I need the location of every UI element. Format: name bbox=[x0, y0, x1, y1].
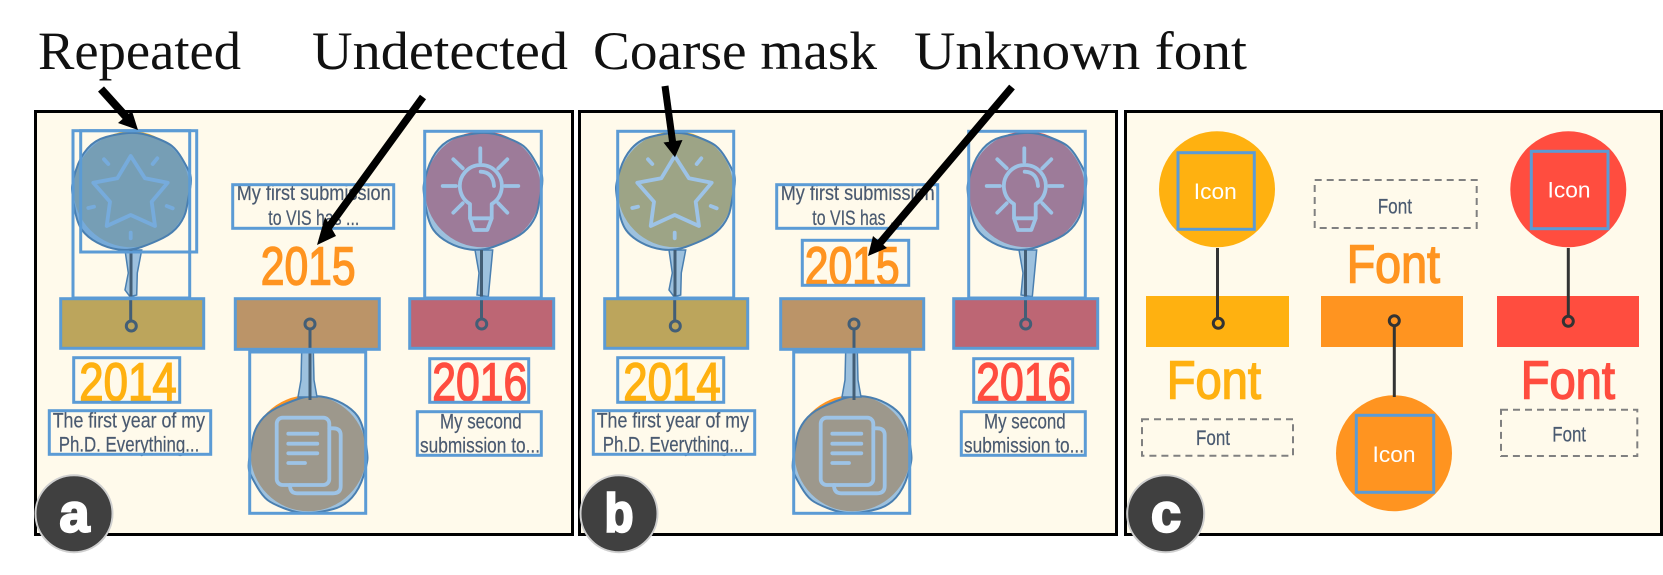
badge: b bbox=[580, 475, 658, 552]
timeline item: 2016 bbox=[954, 131, 1098, 458]
badge: c: c bbox=[1151, 484, 1181, 544]
timeline item: 2015: to VIS has ... bbox=[812, 207, 903, 230]
timeline item: 2016 bbox=[410, 131, 554, 458]
template column 1: Font bbox=[1167, 350, 1261, 410]
timeline item: 2015: 2015 bbox=[805, 236, 900, 296]
timeline item: 2015: to VIS has ... bbox=[268, 207, 359, 230]
timeline item: 2015: My first submission bbox=[781, 182, 935, 205]
template column 1: Font bbox=[1196, 427, 1230, 450]
timeline item: 2015 bbox=[777, 182, 938, 513]
timeline item: 2014 bbox=[49, 131, 211, 457]
timeline item: 2016: submission to... bbox=[964, 435, 1084, 458]
badge: a: a bbox=[60, 484, 90, 544]
panel: b, coarse mask and unknown font errors bbox=[580, 112, 1116, 534]
title: Coarse mask: Coarse mask bbox=[593, 21, 877, 81]
template column 1 bbox=[1142, 131, 1293, 456]
template column 3: Icon bbox=[1548, 178, 1590, 203]
arrow: Repeated bbox=[101, 89, 138, 130]
template column 3: Font bbox=[1552, 424, 1586, 447]
timeline item: 2015: My first submission bbox=[237, 182, 391, 205]
arrow: Unknown font bbox=[868, 87, 1012, 256]
badge: a bbox=[36, 475, 112, 552]
template column 3 bbox=[1497, 131, 1639, 456]
timeline item: 2016: 2016 bbox=[432, 353, 527, 413]
title: Unknown font: Unknown font bbox=[914, 21, 1247, 81]
badge: c bbox=[1127, 475, 1204, 552]
timeline item: 2015 bbox=[233, 182, 394, 513]
timeline item: 2014: Ph.D. Everything... bbox=[603, 434, 743, 457]
panel: c, corrected template bbox=[1126, 112, 1662, 534]
arrow: Coarse mask bbox=[664, 86, 682, 157]
panel: a, repeated and undetected errors bbox=[36, 112, 572, 534]
timeline item: 2014: The first year of my bbox=[53, 409, 205, 432]
timeline item: 2016: submission to... bbox=[420, 435, 540, 458]
timeline item: 2014: 2014 bbox=[623, 353, 721, 413]
arrow: Undetected bbox=[317, 97, 423, 245]
template column 2: Icon bbox=[1372, 442, 1416, 467]
timeline item: 2014 bbox=[593, 131, 755, 457]
title: Undetected: Undetected bbox=[312, 21, 568, 81]
timeline item: 2014: 2014 bbox=[79, 353, 177, 413]
template column 2: Font bbox=[1378, 195, 1412, 218]
template column 3: Font bbox=[1521, 350, 1615, 410]
badge: b: b bbox=[604, 484, 634, 544]
timeline item: 2014: Ph.D. Everything... bbox=[59, 434, 199, 457]
template column 2 bbox=[1315, 180, 1477, 511]
title: Repeated: Repeated bbox=[38, 21, 241, 81]
template column 2: Font bbox=[1347, 234, 1440, 294]
timeline item: 2014: The first year of my bbox=[597, 409, 749, 432]
timeline item: 2016: 2016 bbox=[976, 353, 1071, 413]
timeline item: 2015: 2015 bbox=[261, 236, 356, 296]
timeline item: 2016: My second bbox=[984, 410, 1066, 433]
template column 1: Icon bbox=[1194, 179, 1237, 204]
timeline item: 2016: My second bbox=[440, 410, 522, 433]
